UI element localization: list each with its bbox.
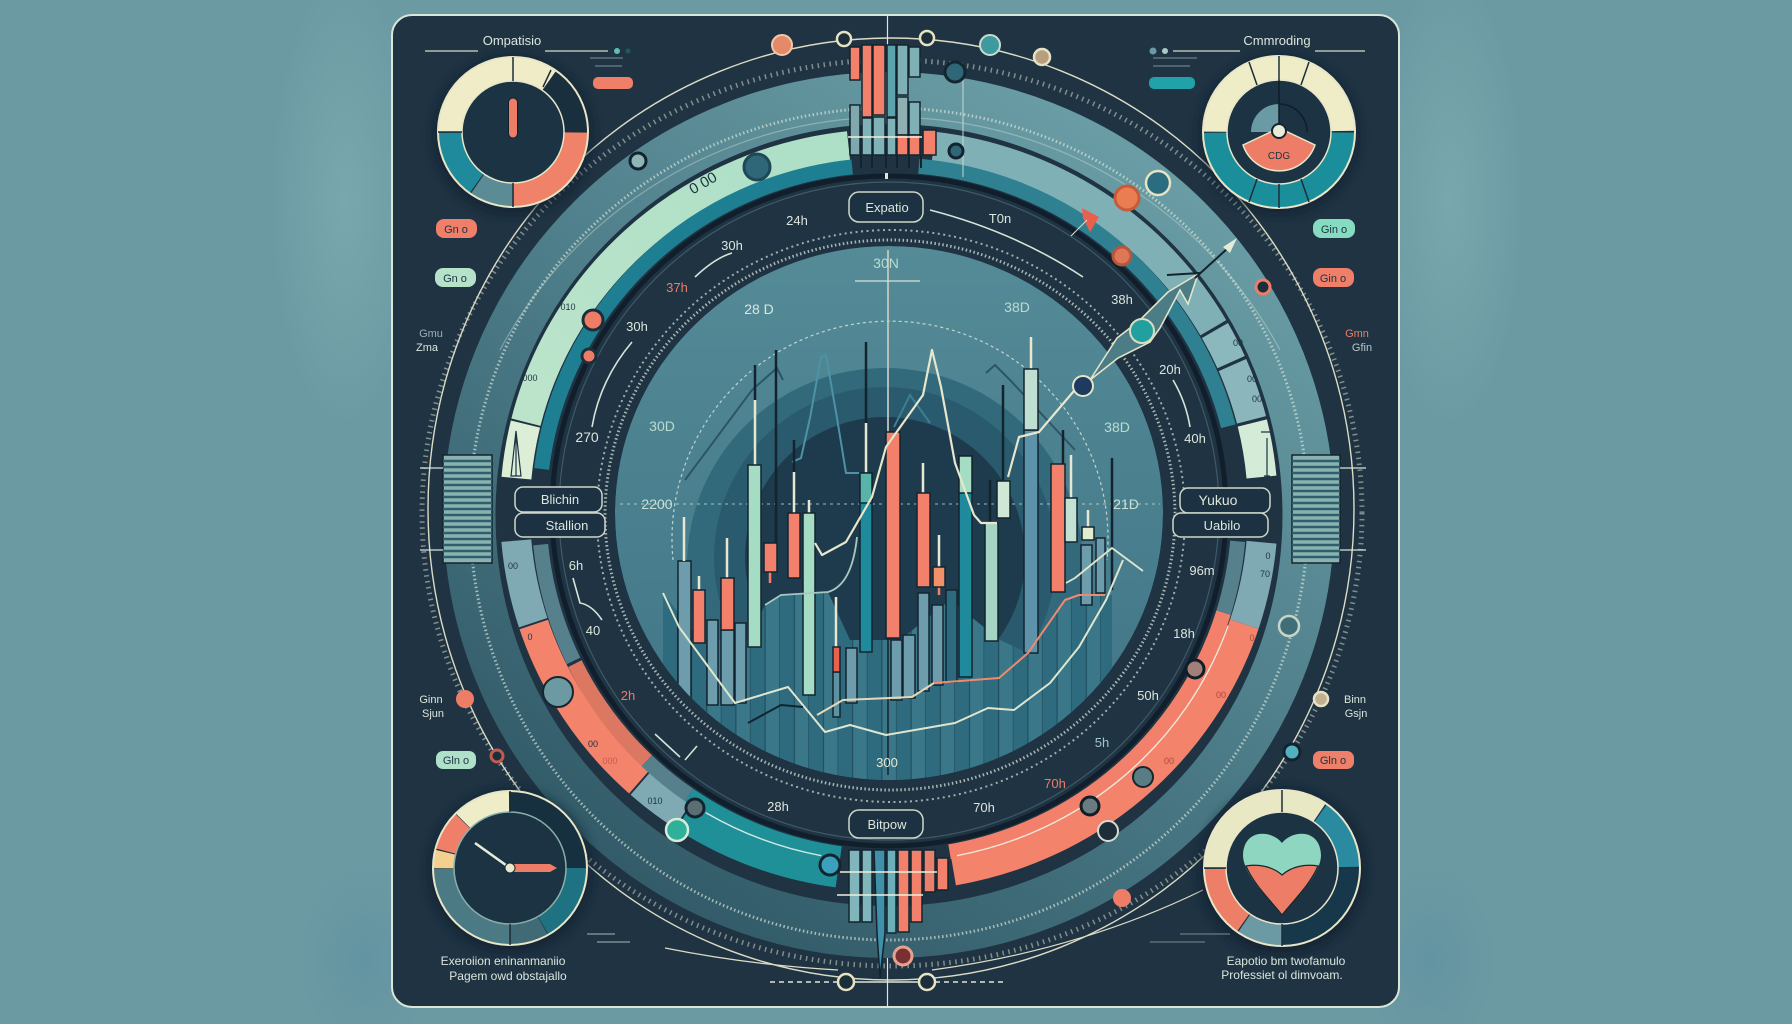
hour and day labels: 2200: [641, 496, 673, 512]
band: grey arc upper right: [515, 144, 1263, 876]
chart mountain outlines: [685, 355, 1075, 480]
text on ring bands: 010: [647, 796, 663, 806]
header: top left: [425, 33, 633, 89]
text on ring bands: 00: [1216, 690, 1226, 700]
inner band: teal bottom: [539, 165, 1239, 857]
text on ring bands: 00: [1164, 756, 1174, 766]
text on ring bands: 0 00: [686, 169, 720, 198]
short cream arcs beside hour labels: [573, 210, 1190, 760]
inner band: teal upper right: [539, 165, 1239, 857]
hour and day labels: 30h: [721, 238, 743, 253]
band: grey arc lower left: [515, 144, 1263, 876]
hour and day labels: 28h: [767, 799, 789, 814]
caption: left upper: Gmu: [419, 328, 443, 340]
hour and day labels: 38h: [1111, 292, 1133, 307]
pill: left one: Blichin: [541, 492, 579, 507]
caption: right lower: Gsjn: [1345, 708, 1367, 720]
caption: left upper: [416, 328, 443, 354]
pill: mint upper right: [1313, 219, 1355, 238]
line: leading trend to arrow: [1007, 390, 1074, 478]
ring: wide grey-teal band: [470, 98, 1308, 932]
text on ring bands: 00: [508, 561, 518, 571]
caption: right upper: [1345, 328, 1372, 354]
pill: right one: [1180, 488, 1270, 513]
hour and day labels: 30h: [626, 319, 648, 334]
line: middle trend dark start: [748, 705, 803, 723]
chart horizontal dashed axis: [620, 504, 1160, 505]
icon: stick glyph in right box: [1261, 432, 1273, 476]
gauge: top right: [1199, 55, 1359, 215]
text on ring bands: [508, 169, 1271, 806]
pill: coral upper left: [436, 219, 477, 238]
band: mint arc upper left: [515, 144, 1263, 876]
band: cream end box right: [515, 144, 1263, 876]
text on ring bands: 010: [560, 302, 576, 312]
pill: coral lower right: Gln o: [1320, 755, 1346, 767]
marker: cream rings: [837, 31, 1328, 990]
inner band: grey short lower left: [539, 165, 1239, 857]
ring: cream divider lines on coral and teal bands: [530, 158, 1248, 862]
footnote: bottom right: Eapotio bm twofamulo: [1227, 954, 1346, 968]
footnote: bottom left: [441, 934, 630, 983]
pill: mint upper left: Gn o: [443, 273, 467, 285]
hour and day labels: 6h: [569, 558, 583, 573]
gauge needle: [508, 98, 518, 138]
panel: dashboard card: [392, 15, 1399, 1007]
text on ring bands: 0: [1265, 551, 1271, 561]
ring: outer segmented band: [515, 144, 1263, 876]
outer side captions: [416, 328, 1372, 720]
band: grey box one right: [515, 144, 1263, 876]
hour and day labels: 40: [586, 623, 600, 638]
pill: right one: Yukuo: [1199, 492, 1238, 508]
chart: central candlestick disc: [615, 246, 1163, 800]
centre label pills: [515, 192, 1270, 838]
band: coral arc lower right: [515, 144, 1263, 876]
caption: right upper: Gfin: [1352, 342, 1372, 354]
header: top left: Ompatisio: [483, 33, 541, 48]
text on ring bands: 00: [1233, 338, 1243, 348]
chart concentric dark humps: [687, 368, 1082, 650]
axis tick under 30N label: [855, 280, 920, 282]
text on ring bands: 00: [588, 739, 598, 749]
text on ring bands: 70: [1260, 569, 1270, 579]
caption: right lower: Binn: [1344, 694, 1366, 706]
hour and day labels: 18h: [1173, 626, 1195, 641]
bottom bar cluster: [837, 850, 948, 978]
caption: left lower: [419, 694, 444, 720]
marker: grey tabs: [543, 677, 1153, 787]
hour and day labels: 70h: [973, 800, 995, 815]
pill: mint lower left: [436, 751, 476, 769]
text on ring bands: 000: [522, 373, 538, 383]
right barcode block: [1292, 455, 1366, 563]
footnote: bottom right: [1150, 934, 1346, 982]
icon: stick glyph in left box: [511, 431, 521, 476]
text on ring bands: 0: [1249, 633, 1255, 643]
hour and day labels: 28 D: [744, 301, 774, 317]
hour and day labels: 37h: [666, 280, 688, 295]
band: cream end box left: [515, 144, 1263, 876]
hour and day labels: 96m: [1189, 563, 1215, 578]
line: middle trend cream: [817, 683, 934, 715]
chart wicks: [684, 250, 1112, 647]
pill: coral upper right: Gin o: [1320, 273, 1346, 285]
ring: inner segmented band: [539, 165, 1239, 857]
gauge: bottom right: [1198, 787, 1366, 955]
hour and day labels: 300: [876, 755, 898, 770]
header: top right: Cmmroding: [1243, 33, 1311, 48]
line: soft hump: [765, 537, 857, 605]
footnote: bottom left: Pagem owd obstajallo: [449, 969, 567, 983]
pill: top: Expatio: [865, 200, 909, 215]
arrow: leading spear pointer: [1071, 208, 1237, 396]
gauge value: CDG: [1268, 151, 1290, 162]
pill: coral lower right: [1313, 751, 1354, 769]
caption: left upper: Zma: [416, 342, 439, 354]
hour and day labels: 38D: [1104, 419, 1130, 435]
icon: heart in bottom right gauge: [1243, 834, 1321, 915]
inner band: grey lower left: [539, 165, 1239, 857]
pill: coral upper left: Gn o: [444, 224, 468, 236]
chart centre axis: [887, 250, 889, 775]
chart background disc: [615, 246, 1163, 780]
caption: right upper: Gmn: [1345, 328, 1369, 340]
band: grey short arc lower left: [515, 144, 1263, 876]
gauge grey quarter: [1251, 104, 1279, 132]
pill: mint upper left: [435, 268, 476, 287]
chart lines: [663, 350, 1143, 735]
band: grey box two right: [515, 144, 1263, 876]
pill: left one: [515, 487, 602, 512]
ring: cream edge of grey band: [500, 117, 1280, 350]
hour and day labels: 2h: [621, 688, 635, 703]
inner band: teal upper left: [539, 165, 1239, 857]
pill: bottom: [849, 810, 923, 838]
hour and day labels: [569, 211, 1215, 815]
hour and day labels: 70h: [1044, 776, 1066, 791]
gauge needle coral: [510, 864, 557, 872]
pill: mint upper right: Gin o: [1321, 224, 1347, 236]
marker: coral dots: [456, 35, 1270, 965]
text on ring bands: 00: [1247, 374, 1257, 384]
footnote: bottom left: Exeroiion eninanmaniio: [441, 954, 566, 968]
chart lighter histogram columns: [678, 538, 1105, 717]
text on ring bands: 0: [527, 632, 533, 642]
line: lower cream trend: [663, 560, 1123, 735]
hour and day labels: 40h: [1184, 431, 1206, 446]
hour and day labels: 30D: [649, 418, 675, 434]
gauge: bottom left: [428, 789, 592, 953]
chart base histogram columns: [663, 592, 1112, 800]
ring: dotted tracks in grey band: [470, 108, 1308, 940]
band: grey arc right: [515, 144, 1263, 876]
hour and day labels: 24h: [786, 213, 808, 228]
band: teal arc bottom: [515, 144, 1263, 876]
hour and day labels: T0n: [989, 211, 1011, 226]
pill: coral upper right: [1313, 268, 1354, 287]
inner band: coral lower right: [539, 165, 1239, 857]
side value pills: [435, 219, 1355, 769]
hour and day labels: 270: [575, 429, 599, 445]
pill: right two: Uabilo: [1204, 518, 1240, 533]
chart dashed guide arc: [672, 321, 1108, 560]
pill: right two: [1173, 513, 1268, 537]
gauge needle white: [475, 843, 510, 868]
footnote: bottom right: Professiet ol dimvoam.: [1221, 968, 1343, 982]
outer thin arc and tick ring: [422, 15, 1362, 1007]
band: coral arc lower left: [515, 144, 1263, 876]
pill: top: [849, 192, 923, 222]
pill: mint lower left: Gln o: [443, 755, 469, 767]
inner band: soft coral lower left: [539, 165, 1239, 857]
left barcode block: [420, 455, 492, 563]
ring: dark track lines and dotted rings around chart: [552, 176, 1226, 846]
caption: right lower: [1344, 694, 1367, 720]
chart candle bodies: [693, 369, 1094, 695]
line: right tail: [1066, 548, 1143, 583]
gauge coral fan: [1243, 128, 1315, 171]
marker: teal and dark rings: [630, 35, 1300, 875]
hour and day labels: 50h: [1137, 688, 1159, 703]
hour and day labels: 38D: [1004, 299, 1030, 315]
inner band: grey right: [539, 165, 1239, 857]
text on ring bands: 000: [602, 756, 618, 766]
pill: coral top left: [593, 77, 633, 89]
hour and day labels: 5h: [1095, 735, 1109, 750]
hour and day labels: 30N: [873, 255, 899, 271]
line: main cream peak: [815, 350, 997, 555]
dial markers along rings: [456, 31, 1328, 990]
pill: bottom: Bitpow: [867, 817, 907, 832]
hour and day labels: 21D: [1113, 496, 1139, 512]
pill: teal top right: [1149, 77, 1195, 89]
caption: left lower: Ginn: [419, 694, 443, 706]
hour and day labels: 20h: [1159, 362, 1181, 377]
gauge: top left: [433, 55, 593, 215]
line: middle trend coral: [934, 595, 1105, 683]
pill: left two: [515, 513, 605, 537]
pill: left two: Stallion: [546, 518, 588, 533]
header: top right: [1149, 33, 1365, 89]
caption: left lower: Sjun: [422, 708, 444, 720]
text on ring bands: 00: [1252, 394, 1262, 404]
top bar cluster: [848, 45, 963, 179]
